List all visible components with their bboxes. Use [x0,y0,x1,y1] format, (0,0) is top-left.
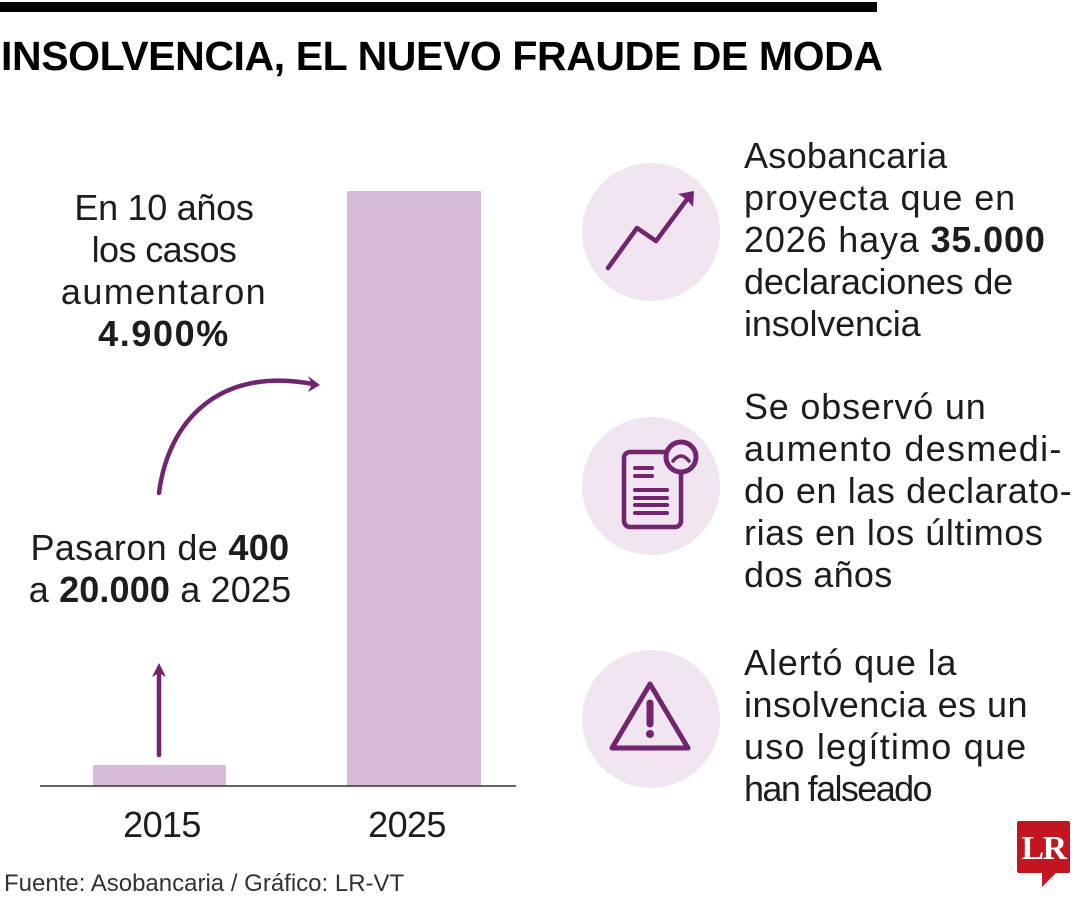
text: 400 to 20000 [29,527,291,610]
text: projection: proyecta que en [744,177,1016,218]
text: increase: rias en los últimos [744,512,1044,553]
logo LR: LR [1021,830,1068,867]
top rule [0,2,877,12]
text: alert: Alertó que la [744,642,957,683]
text: projection: declaraciones de [744,261,1013,302]
text: alert: han falseado [744,768,931,809]
text: increase [744,386,1072,595]
text: increase: Se observó un [744,386,987,427]
icon: warning [582,650,720,788]
source: Fuente: Asobancaria / Gráfico: LR-VT [4,870,404,897]
curved arrow [159,376,320,493]
bar 2015 [93,765,226,786]
text: 400 to 20000: Pasaron de 400 [30,527,290,568]
text: alert [744,642,1028,809]
title: INSOLVENCIA, EL NUEVO FRAUDE DE MODA [1,33,883,79]
bar 2025 [347,191,481,786]
text: 10 years [61,187,267,354]
text: alert: insolvencia es un [744,684,1028,725]
text: increase: aumento desmedi- [744,428,1063,469]
label 2015: 2015 [123,804,201,845]
text: 400 to 20000: a 20.000 a 2025 [29,569,291,610]
text: projection: 2026 haya 35.000 [744,219,1046,260]
text: increase: do en las declarato- [744,470,1072,511]
text: increase: dos años [744,554,893,595]
text: 10 years: En 10 años [74,187,254,228]
text: 10 years: 4.900% [98,313,230,354]
text: alert: uso legítimo que [744,726,1027,767]
label 2025: 2025 [368,804,446,845]
text: projection: insolvencia [744,303,920,344]
icon: growth chart [582,163,720,301]
text: 10 years: aumentaron [61,271,267,312]
text: projection [744,135,1046,344]
logo LR [1017,821,1070,887]
up arrow [152,663,166,755]
text: 10 years: los casos [92,229,236,270]
icon: document [582,417,720,555]
text: projection: Asobancaria [744,135,947,176]
